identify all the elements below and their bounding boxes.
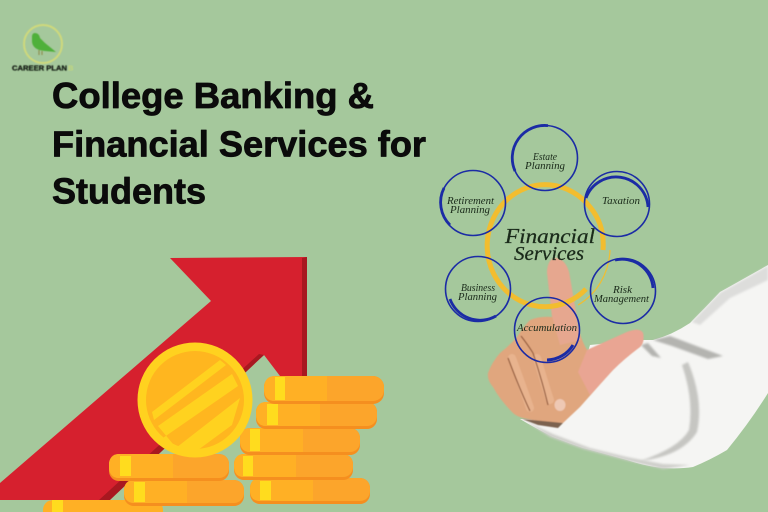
node: Taxation <box>584 172 650 236</box>
node: Estate Planning: Estate <box>532 152 558 163</box>
fingernail <box>554 399 566 411</box>
logo: Career Plan B: B <box>68 64 74 72</box>
icon: red growth arrow <box>0 257 307 500</box>
sleeve fold: upper cuff crease <box>653 336 723 359</box>
node: Retirement Planning: Retirement <box>446 196 494 207</box>
icon: pointing hand <box>488 258 644 428</box>
node: Risk Management <box>590 258 656 324</box>
logo: Career Plan B <box>12 25 74 72</box>
node: Accumulation <box>514 298 580 362</box>
coin: left stack upper <box>109 454 229 481</box>
node: Risk Management: Risk <box>612 285 633 296</box>
sleeve shadow: lower edge <box>525 421 690 469</box>
node: Business Planning: Business <box>461 283 495 294</box>
finger highlights <box>512 358 550 408</box>
diagram: financial services ring <box>440 125 656 363</box>
finger creases <box>508 336 548 411</box>
hand silhouette <box>488 258 644 423</box>
central label <box>504 224 595 265</box>
sleeve fold: small crease <box>641 343 661 358</box>
coin: bottom left partial <box>43 500 163 512</box>
title: College Banking & <box>52 75 374 116</box>
icon: coin stacks <box>43 342 384 512</box>
cuff shadow under hand <box>522 419 563 428</box>
node: Risk Management: Management <box>593 294 649 305</box>
central label: Services <box>514 243 584 265</box>
coin: right stack 2 <box>234 454 353 480</box>
logo: Career Plan B: CAREER PLAN <box>12 64 67 72</box>
node: Estate Planning: Planning <box>524 161 565 172</box>
golden ring <box>487 185 610 307</box>
coin: right stack 1 <box>250 478 370 504</box>
central label: Financial <box>504 224 595 248</box>
title <box>52 75 426 212</box>
node: Estate Planning <box>512 125 578 190</box>
title: Students <box>52 170 206 212</box>
index finger <box>547 258 581 345</box>
coin: large upright <box>138 342 252 458</box>
node: Accumulation: Accumulation <box>516 323 577 334</box>
node: Business Planning: Planning <box>457 292 497 303</box>
node: Retirement Planning: Planning <box>449 205 490 216</box>
sleeve: white shirt <box>520 265 768 469</box>
coin: right stack 5 <box>264 376 384 404</box>
node: Retirement Planning <box>440 170 506 236</box>
sleeve shadow: upper edge <box>692 266 768 325</box>
coin: right stack 3 <box>240 428 360 455</box>
coin: right stack 4 <box>256 402 377 429</box>
node: Business Planning <box>446 256 510 322</box>
coin: left stack lower <box>124 480 244 506</box>
title: Financial Services for <box>52 124 426 164</box>
thumb <box>578 330 644 395</box>
node: Taxation: Taxation <box>602 196 640 207</box>
sleeve fold: cuff edge <box>640 362 699 461</box>
